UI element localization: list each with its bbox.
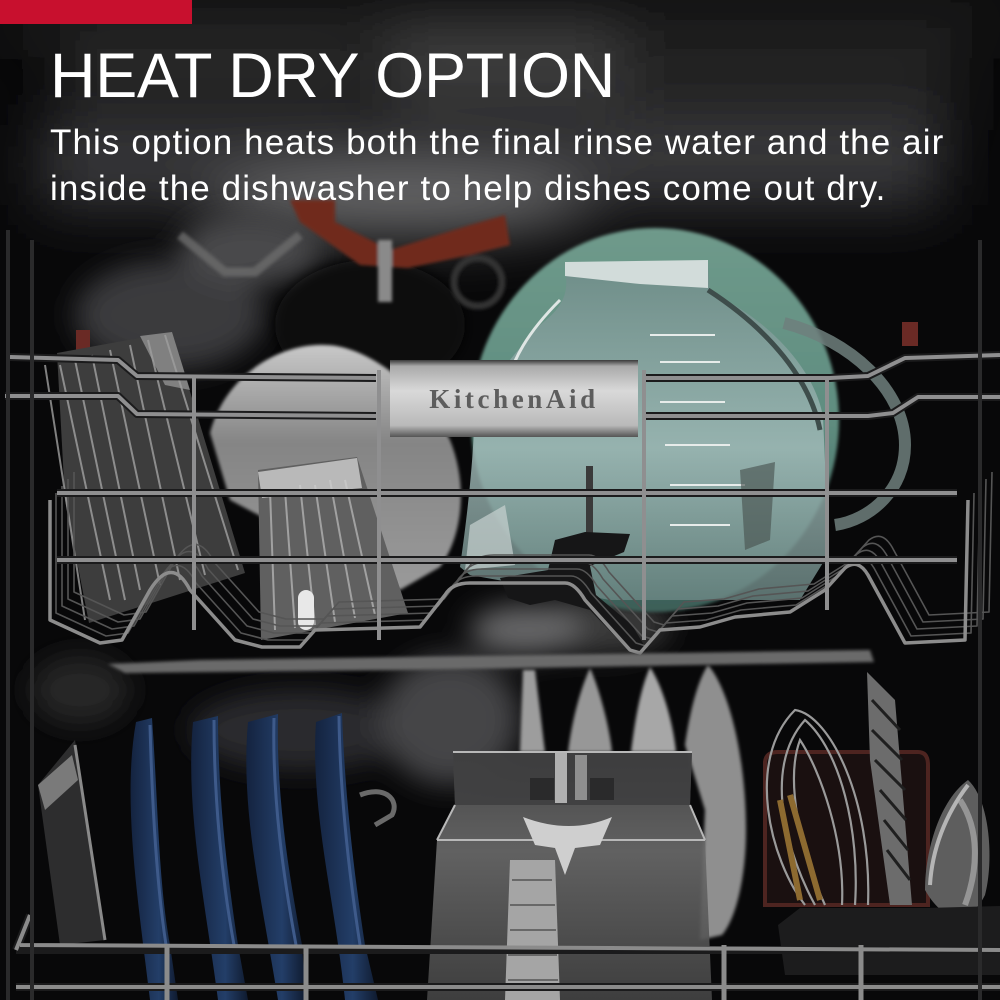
body text [50, 123, 944, 208]
black utensil basket [778, 906, 1000, 975]
KitchenAid nameplate: KitchenAid [429, 384, 599, 414]
title: HEAT DRY OPTION [50, 41, 615, 111]
lower rack wires [16, 915, 1000, 1000]
steam haze behind heading [0, 0, 1000, 233]
grater [867, 672, 912, 905]
red spray arm [180, 200, 510, 306]
small red rack tips [76, 322, 918, 350]
white plate [210, 345, 461, 590]
ladle [925, 780, 989, 917]
blender jar [427, 752, 712, 1000]
glass dish, left [45, 332, 245, 623]
dark swirl behind spray arm [275, 260, 465, 390]
body text: inside the dishwasher to help dishes come out dry. [50, 169, 886, 208]
glass tumbler [258, 457, 408, 640]
upper rack wires [5, 355, 1000, 653]
glass measuring jar [460, 260, 905, 600]
green bowl [471, 228, 839, 612]
red accent bar [0, 0, 192, 24]
dark pot handle [360, 792, 394, 825]
baking dish [38, 740, 105, 945]
black dish peg and clip [500, 466, 650, 655]
steam clouds [30, 215, 670, 785]
body text: This option heats both the final rinse water and the air [50, 123, 944, 162]
side walls [8, 230, 980, 1000]
whisk [767, 710, 868, 905]
lower rack shelf [108, 650, 874, 673]
KitchenAid nameplate [390, 360, 638, 437]
blue dishes [131, 713, 378, 1000]
lower plates [520, 665, 746, 940]
red tray behind utensils [765, 752, 928, 905]
